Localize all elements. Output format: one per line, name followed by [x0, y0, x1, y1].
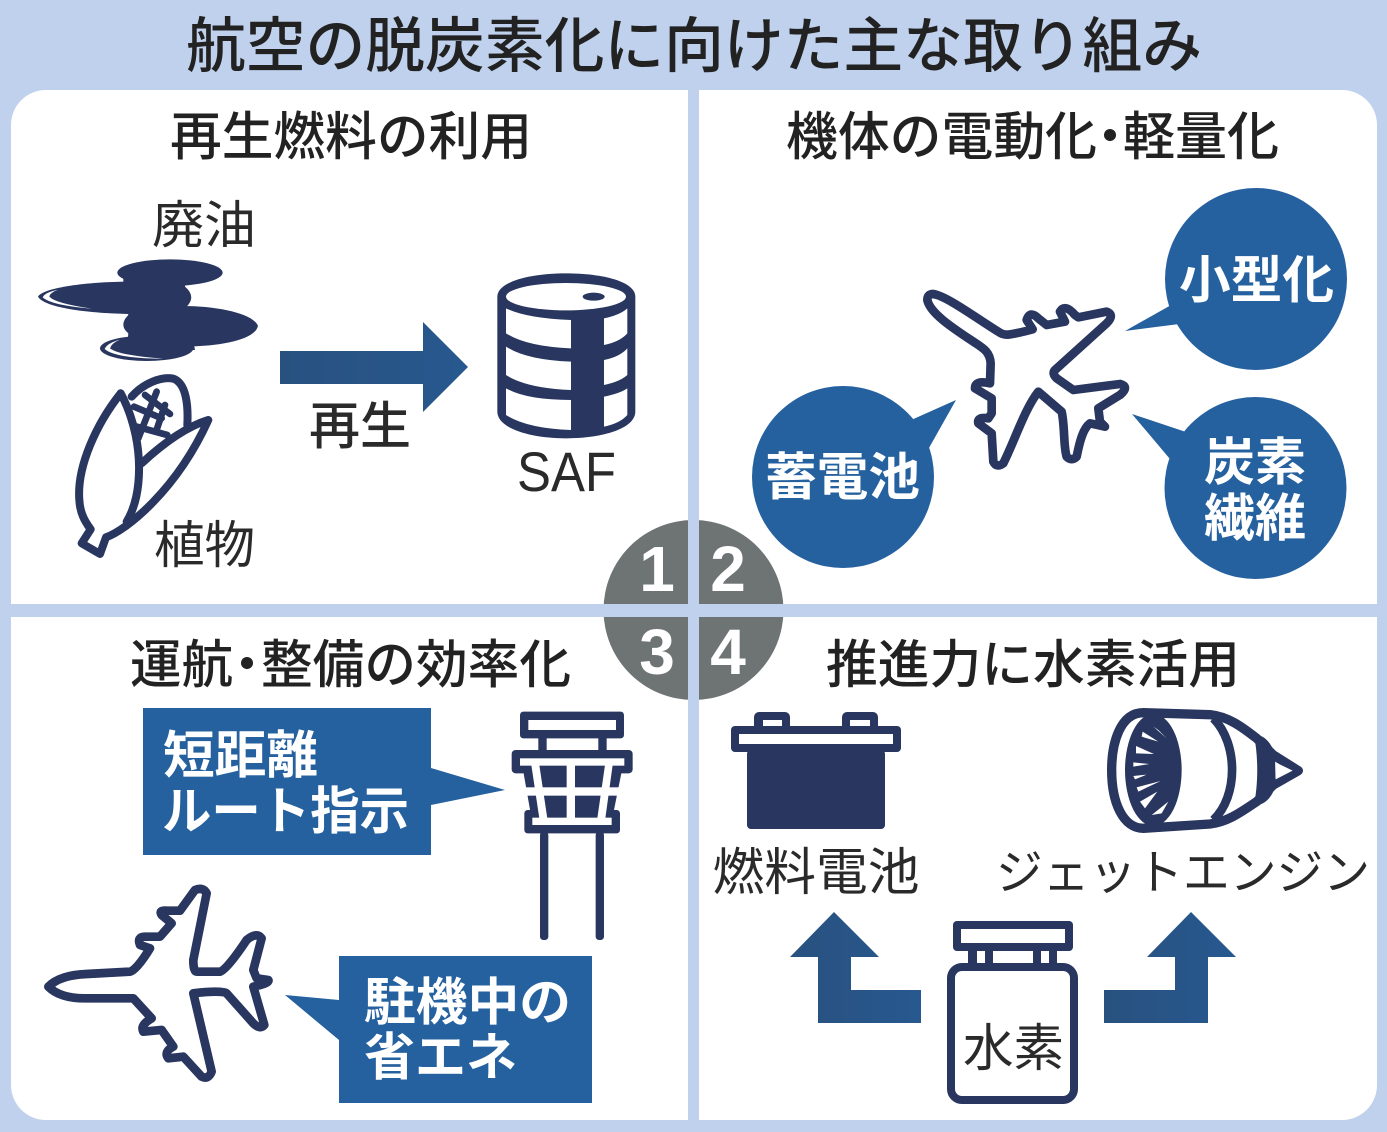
panel 3 background	[11, 617, 688, 1120]
center number badge: 1	[639, 533, 675, 605]
panel 4 heading: 推進力に水素活用	[826, 637, 1240, 695]
icon: jet engine	[1112, 713, 1298, 828]
panel 4 background	[699, 617, 1377, 1120]
label: fuel cell: 燃料電池	[712, 844, 920, 901]
icon: fuel cell battery	[731, 712, 901, 829]
panel 2: electrification and weight reduction	[699, 90, 1377, 604]
label: waste oil: 廃油	[152, 197, 256, 254]
panel 1 heading: 再生燃料の利用	[170, 109, 532, 167]
label: regenerate: 再生	[309, 398, 411, 455]
label: hydrogen: 水素	[963, 1020, 1064, 1077]
callout: energy saving while parked	[285, 956, 592, 1103]
label: jet engine: ジェットエンジン	[996, 847, 1370, 900]
panel 2 heading: 機体の電動化	[786, 109, 1097, 167]
callout: miniaturization: 小型化	[1179, 252, 1334, 309]
panel 4: hydrogen propulsion	[699, 617, 1377, 1120]
panel 1 background	[11, 90, 688, 604]
label: plants: 植物	[154, 517, 255, 574]
icon: corn	[79, 378, 208, 554]
panel 3 heading: ・	[221, 637, 273, 695]
label: SAF: SAF	[517, 440, 616, 503]
panel 3 heading: 運航	[130, 637, 233, 695]
icon: control tower	[512, 712, 633, 940]
icon: airplane outline	[927, 294, 1125, 465]
icon: SAF barrel	[497, 273, 635, 438]
callout: short route instructions: ルート指示	[162, 783, 409, 840]
center number badge: 2	[710, 533, 746, 605]
center number badge	[603, 520, 784, 700]
arrow: regenerate	[280, 322, 468, 412]
icon: hydrogen tank	[951, 921, 1074, 1100]
center number badge: 4	[710, 616, 746, 688]
callout: carbon fiber: 炭素	[1204, 434, 1306, 491]
callout: carbon fiber: 繊維	[1204, 490, 1306, 547]
title: 航空の脱炭素化に向けた主な取り組み	[186, 13, 1202, 80]
center number badge: 3	[639, 616, 675, 688]
panel 2 heading: ・	[1084, 109, 1136, 167]
arrow: to jet engine	[1104, 912, 1236, 1023]
callout: battery	[752, 386, 956, 568]
panel 1: renewable fuel	[11, 90, 688, 604]
icon: airplane outline	[48, 889, 268, 1078]
icon: oil spill	[38, 259, 258, 361]
callout: energy saving while parked: 駐機中の	[364, 974, 571, 1031]
panel 2 heading: 軽量化	[1123, 109, 1279, 167]
callout: energy saving while parked: 省エネ	[364, 1029, 517, 1086]
callout: short route instructions	[143, 708, 505, 855]
arrow: to fuel cell	[790, 912, 921, 1023]
callout: short route instructions: 短距離	[163, 727, 318, 784]
callout: battery: 蓄電池	[765, 449, 920, 506]
panel 3: operations and maintenance efficiency	[11, 617, 688, 1120]
panel 2 background	[699, 90, 1377, 604]
callout: carbon fiber	[1132, 397, 1346, 579]
panel 3 heading: 整備の効率化	[261, 637, 571, 695]
callout: miniaturization	[1125, 188, 1347, 370]
